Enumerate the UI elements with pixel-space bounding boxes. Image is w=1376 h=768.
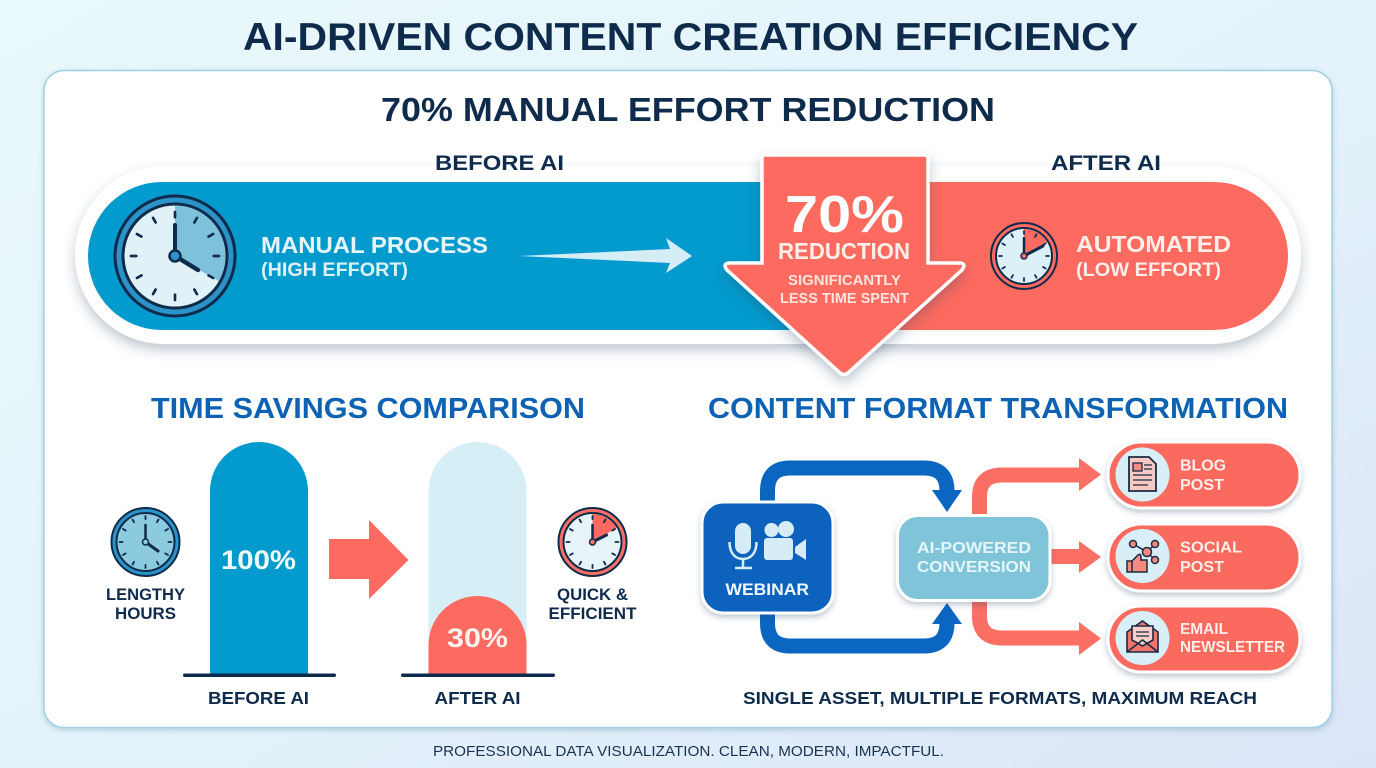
arrow: down arrow shape [725, 155, 964, 374]
pill: blog post: BLOG [1180, 458, 1226, 474]
pill: social post: SOCIAL [1180, 540, 1242, 556]
chart: time savings bars [106, 442, 636, 708]
panel: effort comparison bar [75, 166, 1301, 344]
pill: email newsletter: NEWSLETTER [1180, 639, 1285, 656]
bar white outline [75, 166, 1301, 344]
label: lengthy hours [106, 586, 185, 623]
label: quick and efficient [548, 586, 636, 623]
label: before AI bar: BEFORE AI [208, 688, 309, 708]
arrow: conversion to blog post [980, 458, 1101, 516]
bar: before AI segment [88, 182, 820, 330]
bar: after AI 30% [428, 596, 526, 675]
footer: PROFESSIONAL DATA VISUALIZATION. CLEAN, MODERN, IMPACTFUL. [433, 743, 944, 760]
label: lengthy hours: HOURS [115, 605, 176, 623]
arrow: conversion to social post [1050, 541, 1101, 573]
label: webinar: WEBINAR [726, 581, 809, 599]
label: before AI: BEFORE AI [435, 151, 564, 175]
icon: network and thumbs up [1127, 540, 1158, 572]
arrow: conversion to email newsletter [980, 599, 1101, 655]
value: 30%: 30% [447, 623, 508, 653]
value: 100%: 100% [221, 545, 296, 575]
label: quick and efficient: EFFICIENT [548, 605, 636, 623]
axis: before AI [183, 674, 336, 677]
title: AI-DRIVEN CONTENT CREATION EFFICIENCY [243, 16, 1138, 59]
text: 70%: 70% [785, 186, 904, 244]
text: significantly: SIGNIFICANTLY [788, 273, 901, 289]
heading: 70% manual effort reduction: 70% MANUAL EFFORT REDUCTION [381, 91, 995, 128]
icon: quick clock [558, 508, 626, 576]
node: AI-powered conversion: AI-POWERED [917, 540, 1031, 557]
icon: microphone [730, 523, 756, 568]
text: manual process: MANUAL PROCESS [261, 232, 488, 258]
arrow: thin progress arrow [519, 238, 692, 273]
text: automated: AUTOMATED [1076, 231, 1231, 257]
caption: single asset: SINGLE ASSET, MULTIPLE FORMATS, MAXIMUM REACH [743, 688, 1257, 708]
bar: after AI background [428, 442, 526, 675]
icon: large clock [115, 196, 235, 316]
text: low effort: (LOW EFFORT) [1076, 260, 1221, 281]
label: lengthy hours: LENGTHY [106, 586, 185, 604]
icon: lengthy hours clock [112, 508, 180, 576]
icon: document [1129, 457, 1156, 491]
axis: after AI [401, 674, 555, 677]
heading: content format transformation: CONTENT FORMAT TRANSFORMATION [708, 393, 1288, 425]
callout: 70% reduction arrow [725, 155, 964, 374]
node: AI-powered conversion: CONVERSION [917, 559, 1031, 576]
arrow: webinar to conversion bottom [768, 603, 962, 646]
pill: email newsletter: EMAIL [1180, 621, 1228, 638]
icon: video camera [764, 521, 806, 560]
text: high effort: (HIGH EFFORT) [261, 260, 408, 281]
bar: before AI 100% [210, 442, 308, 675]
pill: social post: POST [1180, 559, 1225, 576]
diagram: content format flow [702, 442, 1300, 672]
icon: envelope [1127, 621, 1158, 652]
pill: social post [1108, 524, 1300, 591]
label: after AI: AFTER AI [1051, 151, 1161, 175]
heading: time savings comparison: TIME SAVINGS COMPARISON [151, 393, 585, 425]
text: reduction: REDUCTION [778, 238, 910, 264]
node: AI-powered conversion [898, 516, 1050, 600]
pill: blog post [1108, 442, 1300, 508]
text: less time spent: LESS TIME SPENT [780, 291, 909, 307]
node: webinar [702, 502, 833, 613]
pill: blog post: POST [1180, 477, 1225, 494]
pill: email newsletter [1108, 606, 1300, 672]
icon: small clock [991, 223, 1057, 289]
label: quick and efficient: QUICK & [557, 586, 628, 604]
label: after AI bar: AFTER AI [434, 688, 520, 708]
bar: after AI segment [800, 182, 1288, 330]
arrow: webinar to conversion top [768, 468, 962, 512]
arrow: before to after [329, 520, 408, 599]
